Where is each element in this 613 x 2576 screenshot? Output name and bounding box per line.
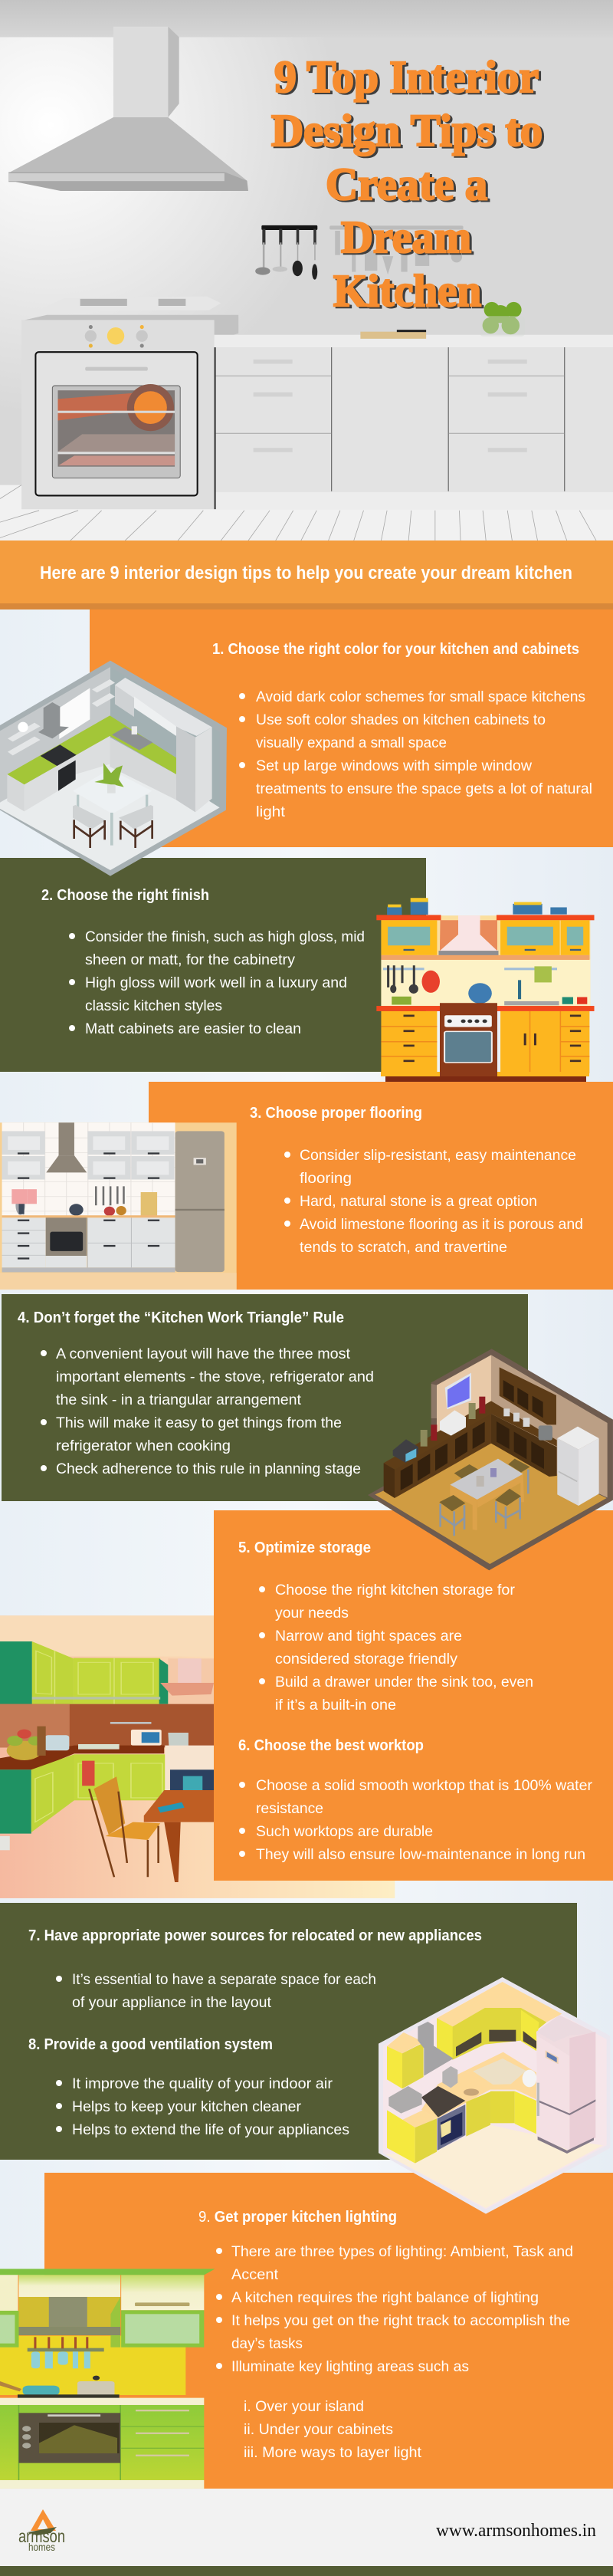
panel: tip 1 — [90, 610, 613, 847]
footer — [0, 2489, 613, 2576]
illustration: isometric grey kitchen — [0, 661, 227, 876]
hero: white kitchen photo — [0, 0, 613, 540]
logo: armson homes: armson — [18, 2526, 65, 2546]
bullet list: tip 8: Helps to keep your kitchen cleaner — [72, 2098, 301, 2115]
page background — [0, 610, 613, 2489]
bullet list: tip 5: your needs — [275, 1605, 349, 1622]
illustration: lime green lit kitchen — [0, 2269, 215, 2489]
bullet list: tip 4: refrigerator when cooking — [56, 1438, 231, 1454]
bullet list: tip 7: of your appliance in the layout — [72, 1994, 272, 2011]
illustration: isometric yellow kitchen — [379, 1977, 611, 2214]
bullet list: tip 9: A kitchen requires the right balance of lighting — [231, 2289, 539, 2306]
heading: tip 1: 1. Choose the right color for your kitchen and cabinets — [212, 641, 579, 658]
bullet list: tip 1: Avoid dark color schemes for small space kitchens — [256, 688, 585, 705]
bullet list: tip 3: Consider slip-resistant, easy maintenance — [300, 1147, 576, 1164]
bullet list: tip 7 — [56, 1971, 376, 2011]
heading: tip 8: 8. Provide a good ventilation system — [28, 2036, 273, 2053]
cooktop — [43, 297, 221, 310]
bullet list: tip 2: classic kitchen styles — [85, 997, 222, 1014]
bullet list: tip 9: iii. More ways to layer light — [244, 2444, 422, 2461]
bullet list: tip 7: It’s essential to have a separate space for each — [72, 1971, 376, 1988]
bullet list: tip 3 — [284, 1147, 583, 1256]
bullet list: tip 5: if it’s a built-in one — [275, 1697, 396, 1714]
bullet list: tip 4: the sink - in a triangular arrangement — [56, 1392, 302, 1408]
website url: www.armsonhomes.in — [436, 2521, 596, 2541]
heading: tip 9: 9. Get proper kitchen lighting — [198, 2209, 397, 2226]
bullet list: tip 1: Use soft color shades on kitchen cabinets to — [256, 711, 546, 728]
bullet list: tip 9: Accent — [231, 2266, 279, 2283]
range hood — [8, 27, 248, 191]
panel: tip 3 — [149, 1082, 613, 1290]
heading: tip 2: 2. Choose the right finish — [41, 887, 209, 904]
bullet list: tip 4: This will make it easy to get things from the — [56, 1414, 342, 1431]
bullet list: tip 4 — [41, 1346, 374, 1477]
bullet list: tip 1: visually expand a small space — [256, 734, 447, 751]
title: Dream — [341, 212, 471, 262]
bullet list: tip 6: resistance — [256, 1800, 323, 1817]
bullet list: tip 6: They will also ensure low-maintenance in long run — [256, 1846, 585, 1863]
floor — [0, 485, 613, 540]
bullet list: tip 2: sheen or matt, for the cabinetry — [85, 951, 295, 968]
illustration: grey cabinets kitchen with fridge — [0, 1122, 237, 1290]
heading: tip 4: 4. Don’t forget the “Kitchen Work Triangle” Rule — [18, 1309, 344, 1326]
bullet list: tip 9: There are three types of lighting: Ambient, Task and — [231, 2243, 573, 2260]
bullet list: tip 2: Consider the finish, such as high gloss, mid — [85, 928, 365, 945]
bullet list: tip 4: Check adherence to this rule in planning stage — [56, 1460, 361, 1477]
bullet list: tip 9: It helps you get on the right track to accomplish the — [231, 2312, 570, 2329]
bullet list: tip 1: Set up large windows with simple window — [256, 757, 533, 774]
panel: tip 4 — [2, 1294, 528, 1501]
title: Create a — [326, 159, 487, 209]
counter and cabinets — [215, 335, 613, 509]
bullet list: tip 5: Choose the right kitchen storage for — [275, 1582, 515, 1598]
bullet list: tip 2: Matt cabinets are easier to clean — [85, 1020, 301, 1037]
bullet list: tip 8: Helps to extend the life of your appliances — [72, 2121, 349, 2138]
bullet list: tip 9: i. Over your island — [244, 2398, 364, 2415]
bullet list: tip 9: ii. Under your cabinets — [244, 2421, 393, 2438]
panel: tips 7 and 8 — [0, 1903, 577, 2160]
bullet list: tip 9: Illuminate key lighting areas such as — [231, 2358, 469, 2375]
bullet list: tip 9: day’s tasks — [231, 2335, 303, 2352]
illustration base: yellow kitchen plinth — [381, 1072, 589, 1082]
bullet list: tip 5: Build a drawer under the sink too, even — [275, 1674, 533, 1691]
heading: tip 3: 3. Choose proper flooring — [250, 1105, 422, 1122]
illustration: isometric brown kitchen — [368, 1349, 613, 1570]
bullet list: tip 1 — [239, 688, 592, 820]
panel: tips 5 and 6 — [214, 1510, 613, 1881]
bullet list: tip 2 — [69, 928, 365, 1037]
bullet list: tip 4: A convenient layout will have the three most — [56, 1346, 351, 1362]
panel: tip 9 — [44, 2173, 613, 2489]
logo: armson homes — [18, 2509, 65, 2553]
bullet list: tip 3: Avoid limestone flooring as it is porous and — [300, 1216, 583, 1233]
bullet list: tip 6 — [239, 1777, 592, 1863]
bullet list: tip 2: High gloss will work well in a luxury and — [85, 974, 347, 991]
title — [271, 51, 543, 316]
illustration: yellow and red kitchen — [376, 898, 595, 1073]
bullet list: tip 3: tends to scratch, and travertine — [300, 1239, 507, 1256]
bullet list: tip 8 — [56, 2075, 349, 2138]
intro banner — [0, 540, 613, 610]
bullet list: tip 5: Narrow and tight spaces are — [275, 1628, 462, 1644]
bullet list: tip 4: important elements - the stove, refrigerator and — [56, 1368, 374, 1385]
logo: armson homes: homes — [28, 2541, 55, 2553]
bowl of green apples — [480, 302, 525, 337]
bullet list: tip 3: flooring — [300, 1170, 352, 1187]
bullet list: tip 3: Hard, natural stone is a great option — [300, 1193, 537, 1210]
panel: tip 2 — [0, 858, 426, 1072]
heading: tip 5: 5. Optimize storage — [238, 1539, 371, 1556]
illustration: peach and green kitchen — [0, 1615, 395, 1898]
black utensil rack — [255, 225, 317, 280]
silver utensil rail — [329, 225, 464, 274]
bullet list: tip 5: considered storage friendly — [275, 1651, 457, 1668]
bullet list: tip 9 — [216, 2243, 573, 2461]
title: 9 Top Interior — [274, 51, 539, 102]
bullet list: tip 6: Choose a solid smooth worktop that is 100% water — [256, 1777, 592, 1794]
bullet list: tip 1: light — [256, 803, 286, 820]
heading: tip 7: 7. Have appropriate power sources for relocated or new appliances — [28, 1927, 482, 1944]
cutting board — [360, 330, 426, 339]
title: Design Tips to — [271, 105, 543, 156]
title: Kitchen — [333, 265, 481, 316]
oven — [21, 315, 238, 511]
bullet list: tip 6: Such worktops are durable — [256, 1823, 433, 1840]
bullet list: tip 1: treatments to ensure the space gets a lot of natural — [256, 780, 592, 797]
bullet list: tip 8: It improve the quality of your indoor air — [72, 2075, 333, 2092]
heading: tip 6: 6. Choose the best worktop — [238, 1737, 424, 1754]
bullet list: tip 5 — [259, 1582, 533, 1714]
